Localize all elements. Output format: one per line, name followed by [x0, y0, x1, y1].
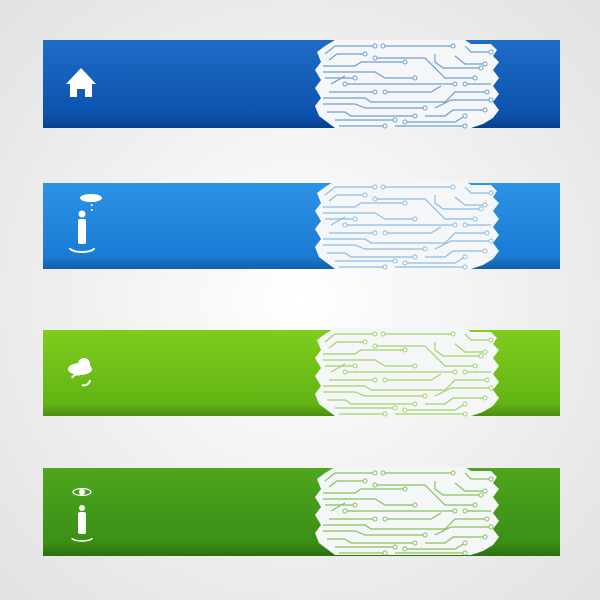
circuit 3	[315, 328, 499, 416]
banner 2: person with cloud	[43, 181, 560, 269]
circuit 4	[315, 467, 499, 555]
icon: person cloud	[70, 194, 102, 252]
banner 4: person atom	[43, 467, 560, 556]
circuit 1	[315, 40, 499, 128]
banner 1: home	[43, 40, 560, 128]
banner 3: cloud sync	[43, 328, 560, 416]
icon: house	[66, 68, 96, 97]
icon: cloud arrows	[68, 358, 92, 385]
circuit 2	[315, 181, 499, 269]
icon: person with atom	[72, 488, 92, 541]
